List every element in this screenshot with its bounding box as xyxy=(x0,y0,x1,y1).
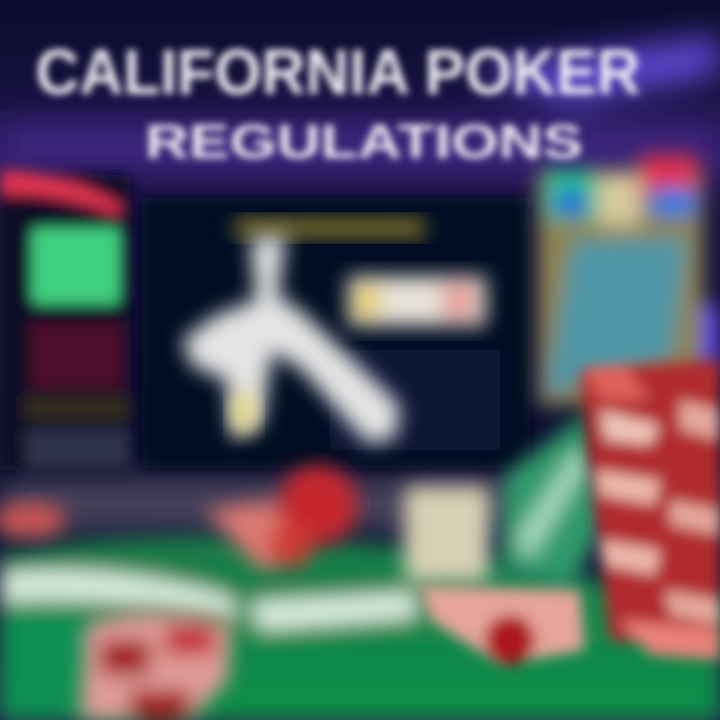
grey panel xyxy=(25,430,130,468)
cream chip stack xyxy=(404,486,490,582)
screen heading bar xyxy=(235,218,425,238)
green chip stack xyxy=(500,410,600,590)
green poker table xyxy=(0,536,720,720)
centre red dice xyxy=(205,465,358,570)
map marker xyxy=(231,390,257,434)
title: REGULATIONS xyxy=(145,116,583,169)
foreground chip stack xyxy=(80,612,232,720)
screen stat number xyxy=(348,276,486,326)
green panel xyxy=(32,228,120,304)
left chip xyxy=(0,502,66,538)
olive panel xyxy=(25,396,130,420)
central dark screen xyxy=(142,198,530,468)
title: CALIFORNIA POKER xyxy=(36,36,640,108)
California map silhouette xyxy=(182,234,400,444)
dark red panel xyxy=(30,324,122,388)
left side panel xyxy=(0,170,130,470)
right tablet xyxy=(538,155,720,405)
red and white chip stacks xyxy=(420,360,720,665)
title xyxy=(36,36,640,169)
